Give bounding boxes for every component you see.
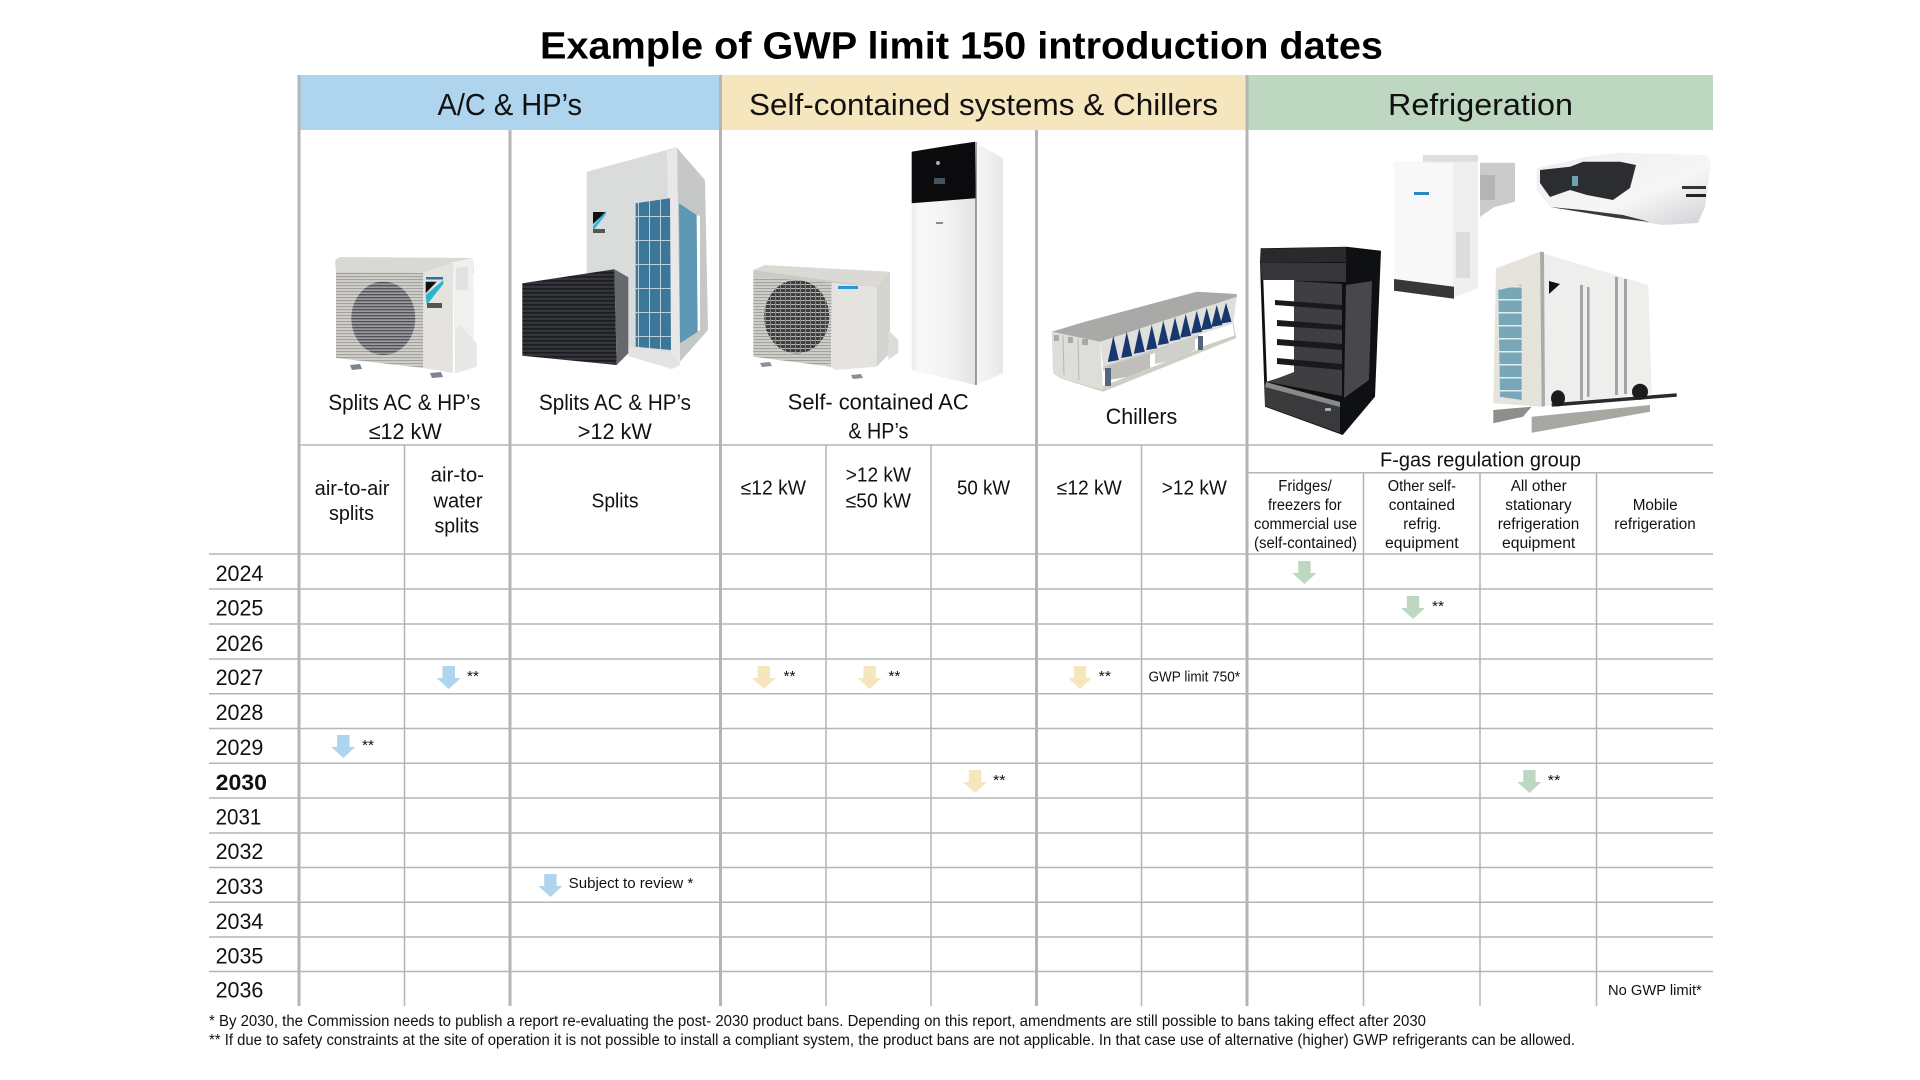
text: Self-contained AC & HP's xyxy=(788,389,969,443)
text: all other stationary refrigeration equipment xyxy=(1498,478,1579,552)
arrow: chillers up to 12 kW 2027 xyxy=(1068,666,1111,689)
text: air-to-air splits: splits xyxy=(329,503,374,525)
arrow: 50 kW 2030 xyxy=(963,770,1006,793)
arrow: other stationary refrigeration 2030 xyxy=(1517,770,1561,793)
arrow: 50 kW 2030: ** xyxy=(993,772,1006,789)
text: other self-contained refrigeration equipment: Other self- xyxy=(1388,478,1456,495)
arrow: other self-contained refrigeration 2025: ** xyxy=(1432,598,1444,615)
year labels xyxy=(216,561,267,1002)
text: fridges and freezers for commercial use: freezers for xyxy=(1268,497,1342,514)
text: air-to-water splits: water xyxy=(432,491,483,513)
text: 12 to 50 kW: >12 kW xyxy=(846,465,911,487)
arrow: self-contained up to 12 kW 2027 xyxy=(752,666,796,689)
year labels: 2034 xyxy=(216,909,263,934)
year labels: 2030 xyxy=(216,770,267,795)
text: Splits AC & HP's above 12 kW: >12 kW xyxy=(578,419,652,444)
arrow: splits 2033 subject to review xyxy=(538,874,693,897)
icon: large VRV outdoor unit with black heat pump xyxy=(522,147,708,369)
icon: industrial chiller unit xyxy=(1052,292,1237,392)
text: 12 to 50 kW xyxy=(846,465,911,513)
text: air-to-air splits xyxy=(315,478,390,525)
text: fridges and freezers for commercial use: commercial use xyxy=(1254,516,1357,533)
text: other self-contained refrigeration equipment: contained xyxy=(1389,497,1455,514)
arrow: fridges and freezers 2024 xyxy=(1292,561,1316,584)
panel: A/C & HP's header band: A/C & HP’s xyxy=(438,87,582,122)
year labels: 2024 xyxy=(216,561,263,586)
text: fridges and freezers for commercial use: (self-contained) xyxy=(1254,535,1357,552)
year labels: 2029 xyxy=(216,735,263,760)
year labels: 2033 xyxy=(216,874,263,899)
text: chillers up to 12 kW: ≤12 kW xyxy=(1057,477,1122,499)
year labels: 2028 xyxy=(216,700,263,725)
text: 12 to 50 kW: ≤50 kW xyxy=(846,491,911,513)
year labels: 2036 xyxy=(216,977,263,1002)
panel: Refrigeration header band: Refrigeration xyxy=(1388,87,1573,122)
text: air-to-water splits: splits xyxy=(434,516,479,538)
text: air-to-air splits: air-to-air xyxy=(315,478,390,500)
text: Self-contained AC & HP's: Self- contained AC xyxy=(788,389,969,414)
panel: Self-contained systems & Chillers header band xyxy=(720,75,1247,130)
year labels: 2025 xyxy=(216,596,263,621)
text: mobile refrigeration: refrigeration xyxy=(1614,516,1696,533)
arrow: other self-contained refrigeration 2025 xyxy=(1401,596,1444,619)
arrow: other stationary refrigeration 2030: ** xyxy=(1548,772,1561,789)
year labels: 2026 xyxy=(216,631,263,656)
panel: Self-contained systems & Chillers header band: Self-contained systems & Chillers xyxy=(749,87,1218,122)
text: Splits AC & HP's above 12 kW xyxy=(539,390,691,444)
text: air-to-water splits: air-to- xyxy=(431,465,484,487)
panel: A/C & HP's header band xyxy=(299,75,720,130)
text: all other stationary refrigeration equipment: refrigeration xyxy=(1498,516,1579,533)
icon: self-contained outdoor unit xyxy=(753,265,898,379)
text: Self-contained AC & HP's: & HP’s xyxy=(848,418,908,443)
text: all other stationary refrigeration equipment: stationary xyxy=(1505,497,1572,514)
arrow: air-to-water splits 2027: ** xyxy=(467,668,479,685)
year labels: 2035 xyxy=(216,943,263,968)
text: fridges and freezers for commercial use: Fridges/ xyxy=(1278,478,1332,495)
text: 50 kW: 50 kW xyxy=(957,477,1010,499)
arrow: splits 2033 subject to review: Subject to review * xyxy=(569,875,693,892)
text: Splits AC & HP's up to 12 kW: Splits AC & HP’s xyxy=(328,390,480,415)
arrow: chillers up to 12 kW 2027: ** xyxy=(1099,668,1111,685)
note: GWP limit 750: GWP limit 750* xyxy=(1148,669,1240,686)
icon: large refrigeration condensing unit xyxy=(1493,252,1677,433)
text: fridges and freezers for commercial use xyxy=(1254,478,1357,552)
text: Splits AC & HP's up to 12 kW: ≤12 kW xyxy=(369,419,442,444)
footnotes: * By 2030, the Commission needs to publish a report re-evaluating the post- 2030 product bans. Depending on this report, amendments are still possible to bans taking effect after 2030 xyxy=(209,1013,1426,1030)
text: Splits AC & HP's above 12 kW: Splits AC & HP’s xyxy=(539,390,691,415)
icon: Zanotti transport refrigeration unit xyxy=(1537,153,1711,225)
text: mobile refrigeration: Mobile xyxy=(1633,497,1678,514)
text: other self-contained refrigeration equipment xyxy=(1385,478,1459,552)
text: mobile refrigeration xyxy=(1614,497,1696,533)
text: Chillers: Chillers xyxy=(1106,404,1177,429)
note: no GWP limit: No GWP limit* xyxy=(1608,982,1702,999)
arrow: self-contained 12 to 50 kW 2027 xyxy=(858,666,901,689)
year labels: 2031 xyxy=(216,805,261,830)
text: up to 12 kW self-contained: ≤12 kW xyxy=(741,477,806,499)
arrow: air-to-water splits 2027 xyxy=(437,666,479,689)
year labels: 2027 xyxy=(216,665,263,690)
text: chillers above 12 kW: >12 kW xyxy=(1162,477,1227,499)
icon: all-in-one indoor tower xyxy=(912,142,1003,385)
icon: white monoblock refrigeration unit xyxy=(1394,155,1515,299)
text: Splits AC & HP's up to 12 kW xyxy=(328,390,480,444)
arrow: self-contained up to 12 kW 2027: ** xyxy=(784,668,796,685)
text: air-to-water splits xyxy=(431,465,484,538)
footnotes: ** If due to safety constraints at the site of operation it is not possible to install a compliant system, the product bans are not applicable. In that case use of alternative (higher) GWP refrigerants can be allowed. xyxy=(209,1032,1575,1049)
arrow: air-to-air splits 2029 xyxy=(331,735,374,758)
icon: compact split outdoor unit xyxy=(335,257,477,378)
icon: commercial display fridge xyxy=(1260,247,1381,435)
text: other self-contained refrigeration equipment: refrig. xyxy=(1403,516,1441,533)
text: other self-contained refrigeration equipment: equipment xyxy=(1385,535,1459,552)
title: Example of GWP limit 150 introduction dates xyxy=(540,26,1383,68)
arrow: air-to-air splits 2029: ** xyxy=(362,737,374,754)
year labels: 2032 xyxy=(216,839,263,864)
text: Splits: Splits xyxy=(592,491,638,513)
text: all other stationary refrigeration equipment: All other xyxy=(1511,478,1567,495)
heading: F-gas regulation group: F-gas regulation group xyxy=(1380,450,1581,472)
text: all other stationary refrigeration equipment: equipment xyxy=(1502,535,1576,552)
arrow: self-contained 12 to 50 kW 2027: ** xyxy=(888,668,901,685)
panel: Refrigeration header band xyxy=(1247,75,1713,130)
footnotes xyxy=(209,1013,1575,1049)
